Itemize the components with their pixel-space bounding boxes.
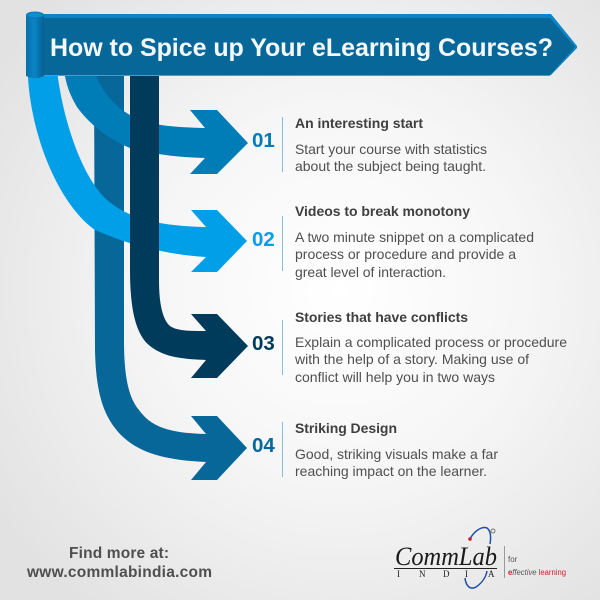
title banner <box>26 12 577 78</box>
body 02: A two minute snippet on a complicated <box>295 229 534 245</box>
title: How to Spice up Your eLearning Courses? <box>50 34 553 62</box>
number 01: 01 <box>252 129 275 152</box>
logo: A <box>488 569 495 579</box>
arrow 2 <box>28 70 247 272</box>
logo: I <box>465 569 468 579</box>
logo tagline: for <box>508 555 518 564</box>
arrow 4 <box>94 70 247 480</box>
body 04: reaching impact on the learner. <box>295 463 487 479</box>
logo: N <box>419 569 426 579</box>
body 02: great level of interaction. <box>295 264 446 280</box>
body 01: Start your course with statistics <box>295 141 487 157</box>
arrow 3 <box>130 70 248 378</box>
banner roll <box>26 12 44 78</box>
number 02: 02 <box>252 228 275 251</box>
logo <box>394 528 566 588</box>
number 03: 03 <box>252 332 275 355</box>
arrow 1 <box>64 70 248 174</box>
heading 01: An interesting start <box>295 115 423 131</box>
body 03: Explain a complicated process or procedure <box>295 334 567 350</box>
body 03: conflict will help you in two ways <box>295 369 495 385</box>
logo orbit <box>470 528 491 544</box>
body 01: about the subject being taught. <box>295 158 486 174</box>
number 04: 04 <box>252 434 275 457</box>
footer link <box>26 545 212 581</box>
item 03 <box>252 309 567 385</box>
footer link: www.commlabindia.com <box>26 564 212 581</box>
body 02: process or procedure and provide a <box>295 246 516 262</box>
heading 02: Videos to break monotony <box>295 203 470 219</box>
logo wordmark: CommLab <box>395 542 497 571</box>
item 01 <box>252 115 487 174</box>
logo: D <box>443 569 450 579</box>
body 04: Good, striking visuals make a far <box>295 446 498 462</box>
logo tagline: effective learning <box>508 568 567 577</box>
heading 04: Striking Design <box>295 420 397 436</box>
item 02 <box>252 203 534 280</box>
body 03: with the help of a story. Making use of <box>294 351 529 367</box>
footer link: Find more at: <box>69 545 169 562</box>
heading 03: Stories that have conflicts <box>295 309 468 325</box>
logo: I <box>397 569 400 579</box>
item 04 <box>252 420 498 479</box>
